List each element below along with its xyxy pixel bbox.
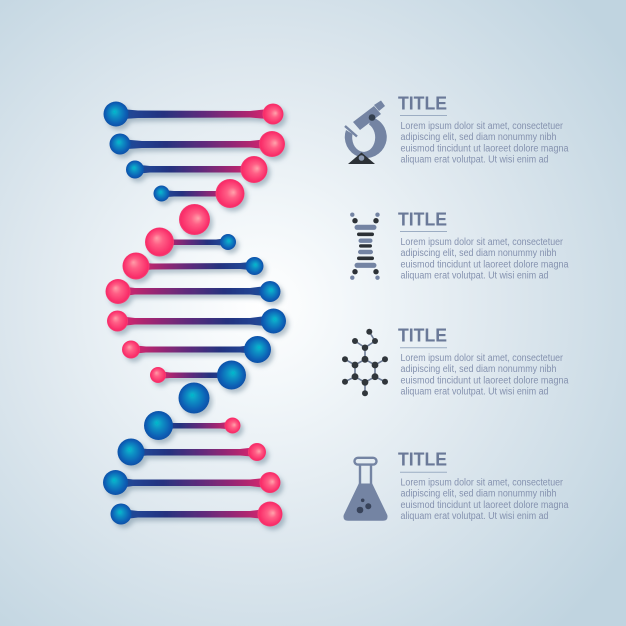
block 1 body text <box>400 121 569 166</box>
block 2 title: TITLE <box>398 210 447 230</box>
rung 1 <box>104 102 284 126</box>
rung 2 <box>110 131 285 157</box>
block 2 body text <box>400 237 569 282</box>
block 3 body text <box>400 353 569 398</box>
rung 13 <box>144 411 240 440</box>
rung 12: single blue ball <box>178 382 210 414</box>
block 3 body text: aliquam erat volutpat. Ut wisi enim ad <box>400 387 548 398</box>
block 4 body text: adipiscing elit, sed diam nonummy nibh <box>400 489 556 500</box>
block 3 title: TITLE <box>398 326 447 346</box>
icon: dna strand <box>350 212 380 280</box>
rung 3 <box>126 156 268 183</box>
icon: flask <box>343 458 388 521</box>
block 4 body text: Lorem ipsum dolor sit amet, consectetuer <box>400 478 564 488</box>
block 2 body text: Lorem ipsum dolor sit amet, consectetuer <box>400 237 564 248</box>
block 1 body text: aliquam erat volutpat. Ut wisi enim ad <box>400 155 548 166</box>
block 1 title: TITLE <box>398 94 447 114</box>
rung 7 <box>122 252 264 280</box>
icon: molecule <box>342 329 388 396</box>
icon: microscope <box>345 100 387 164</box>
block 2 body text: aliquam erat volutpat. Ut wisi enim ad <box>400 271 548 282</box>
block 1 body text: adipiscing elit, sed diam nonummy nibh <box>400 132 556 143</box>
rung 6 <box>145 228 236 256</box>
block 4 title: TITLE <box>398 450 447 470</box>
block 3 body text: euismod tincidunt ut laoreet dolore magna <box>400 375 569 386</box>
block 3 body text: Lorem ipsum dolor sit amet, consectetuer <box>400 353 564 364</box>
dna double helix <box>103 102 286 526</box>
rung 5: single pink ball <box>179 204 210 235</box>
rung 9 <box>107 308 286 334</box>
rung 15 <box>103 470 280 495</box>
rung 4 <box>154 179 244 208</box>
rung 16 <box>110 502 282 526</box>
block 4 body text: euismod tincidunt ut laoreet dolore magna <box>400 500 569 511</box>
block 3 body text: adipiscing elit, sed diam nonummy nibh <box>400 364 556 375</box>
rung 14 <box>118 438 266 466</box>
rung 11 <box>150 360 246 390</box>
block 1 body text: euismod tincidunt ut laoreet dolore magna <box>400 143 569 154</box>
rung 8 <box>106 279 280 304</box>
rung 10 <box>122 336 271 363</box>
block 4 body text: aliquam erat volutpat. Ut wisi enim ad <box>400 511 548 522</box>
block 1 body text: Lorem ipsum dolor sit amet, consectetuer <box>400 121 564 132</box>
block 2 body text: adipiscing elit, sed diam nonummy nibh <box>400 248 556 259</box>
block 4 body text <box>400 478 569 522</box>
block 2 body text: euismod tincidunt ut laoreet dolore magna <box>400 259 569 270</box>
